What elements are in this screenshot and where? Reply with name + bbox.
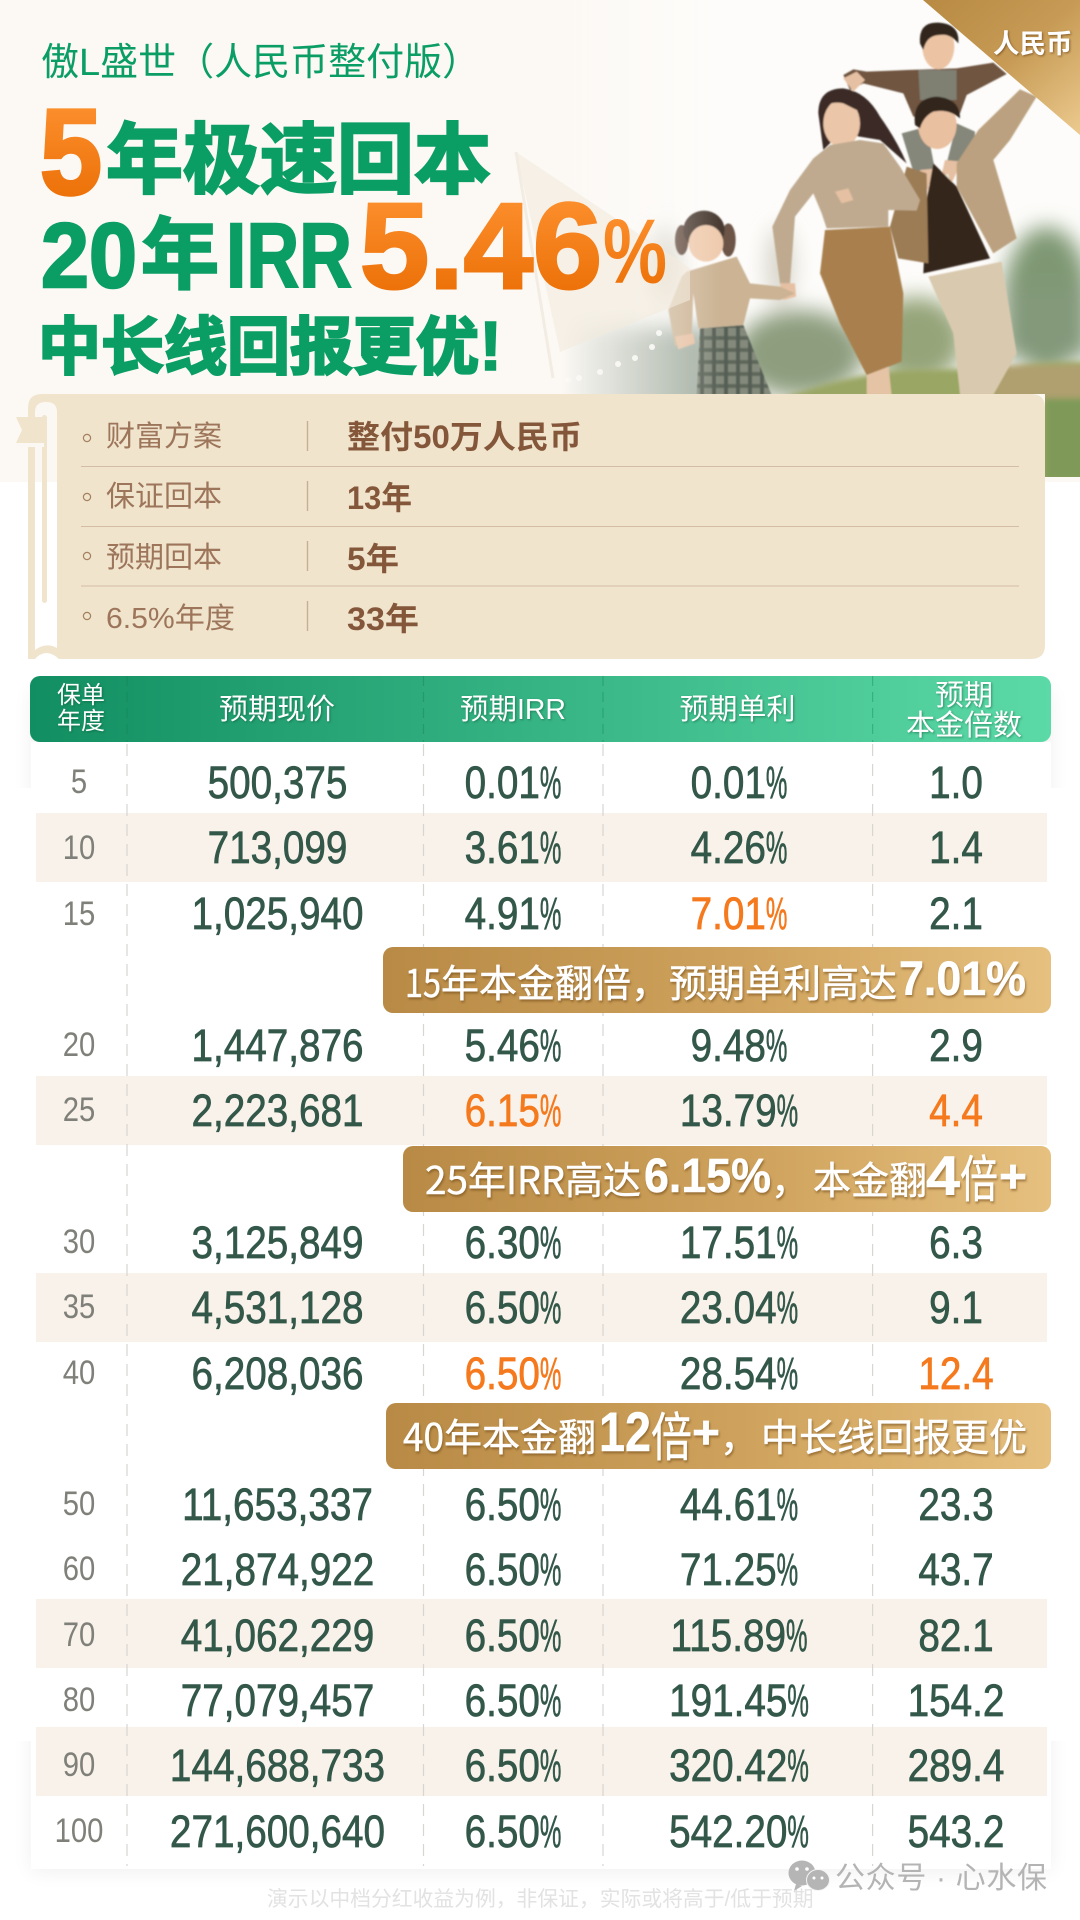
row: 6.5%年度: 6.5%年度 — [106, 602, 235, 635]
callout: 25 year: 4 — [926, 1144, 960, 1207]
row: year 40 — [63, 1348, 994, 1399]
row: year 20: 9.48% — [691, 1020, 787, 1071]
corner ribbon: 人民币 — [923, 0, 1080, 135]
row: year 70: 6.50% — [465, 1610, 561, 1661]
row: year 15: 4.91% — [465, 888, 561, 939]
row: year 40: 12.4 — [918, 1348, 994, 1399]
row: year 20 — [63, 1020, 983, 1071]
row: year 50 — [63, 1479, 994, 1530]
callout: 25 year — [403, 1140, 1051, 1212]
row: year 25: 13.79% — [680, 1085, 798, 1136]
table rows — [55, 757, 1004, 1857]
row: year 15: 2.1 — [929, 888, 983, 939]
row: year 20: 2.9 — [929, 1020, 983, 1071]
row: year 25: 2,223,681 — [191, 1085, 364, 1136]
row: year 70: 115.89% — [671, 1610, 807, 1661]
callout: 25 year: IRR — [506, 1150, 565, 1205]
table header: 年度 — [57, 708, 105, 735]
row: year 10: 10 — [63, 828, 95, 867]
row: year 70: 82.1 — [918, 1610, 994, 1661]
table header: 预期现价 — [219, 694, 335, 726]
row: 财富方案: 整付50万人民币 — [347, 419, 582, 455]
row: 预期回本: 5年 — [347, 541, 399, 577]
table stripes — [36, 813, 1047, 1796]
table header: 保单 — [57, 682, 105, 709]
background: misty trees — [575, 213, 1080, 394]
product name: 傲L盛世（人民币整付版） — [41, 42, 480, 84]
row: year 10: 4.26% — [691, 822, 787, 873]
row: year 70: 41,062,229 — [181, 1610, 374, 1661]
row: year 5: 0.01% — [691, 757, 787, 808]
row: year 80: 80 — [63, 1680, 95, 1719]
row: year 30: 6.30% — [465, 1217, 561, 1268]
row: year 60: 60 — [63, 1549, 95, 1588]
row: year 30 — [63, 1217, 983, 1268]
row: year 10: 713,099 — [208, 822, 347, 873]
row: 预期回本: 预期回本 — [106, 541, 222, 574]
callout: 15 year: 年本金翻倍，预期单利高达 — [441, 953, 897, 1008]
headline line 2 — [41, 178, 667, 314]
row: 预期回本 — [83, 541, 399, 577]
table header: 预期单利 — [679, 693, 796, 726]
callout: 25 year: 年 — [468, 1150, 506, 1205]
row: year 80 — [63, 1675, 1004, 1726]
headline line 2: IRR — [226, 205, 352, 307]
row: year 5 — [71, 757, 983, 808]
row: year 25: 6.15% — [465, 1085, 561, 1136]
row: year 10: 1.4 — [929, 822, 983, 873]
row: year 5: 500,375 — [208, 757, 347, 808]
callout: 40 year: 中长线回报更优 — [761, 1407, 1027, 1462]
callout: 15 year — [383, 947, 1051, 1013]
row: year 20: 5.46% — [465, 1020, 561, 1071]
row: year 50: 11,653,337 — [182, 1479, 373, 1530]
row: year 50: 50 — [63, 1484, 95, 1523]
row: year 50: 6.50% — [465, 1479, 561, 1530]
callout: 25 year: 高达 — [565, 1150, 641, 1205]
row: year 90: 90 — [63, 1745, 95, 1784]
row: year 25 — [63, 1085, 983, 1136]
background: grass — [787, 361, 1080, 483]
callout: 25 year: ， — [771, 1150, 809, 1205]
row: year 80: 6.50% — [465, 1675, 561, 1726]
headline line 2: 年 — [141, 193, 219, 305]
photo: family running in field — [560, 0, 1080, 483]
row: 保证回本: 13年 — [347, 480, 412, 516]
headline line 1: 年极速回本 — [106, 99, 491, 210]
callout: 15 year: 7.01% — [899, 953, 1026, 1006]
callout: 15 year: 15 — [405, 953, 441, 1008]
row: 6.5%年度 — [83, 601, 419, 637]
table header: 预期 — [935, 680, 993, 712]
row: year 40: 6.50% — [465, 1348, 561, 1399]
panel: wealth plan summary — [16, 394, 1045, 660]
title block — [38, 42, 667, 388]
row: year 10 — [63, 822, 983, 873]
callout: 40 year: 12 — [599, 1400, 651, 1463]
callout: 40 year: 40 — [403, 1407, 444, 1462]
row: year 50: 44.61% — [680, 1479, 798, 1530]
headline line 1: 5 — [40, 84, 102, 220]
row: year 90: 6.50% — [465, 1740, 561, 1791]
row: year 60: 43.7 — [918, 1544, 994, 1595]
row: 保证回本 — [83, 480, 412, 516]
book spine slot — [35, 402, 57, 650]
figure: woman — [772, 72, 920, 395]
row: year 70 — [63, 1610, 994, 1661]
callout: 40 year: + — [692, 1406, 720, 1458]
headline line 3: ! — [479, 307, 502, 385]
row: year 10: 3.61% — [465, 822, 561, 873]
row: year 90: 320.42% — [669, 1740, 809, 1791]
row: 6.5%年度: 33年 — [347, 601, 419, 637]
row: year 90: 144,688,733 — [170, 1740, 385, 1791]
hero background — [0, 0, 1080, 482]
row: year 80: 77,079,457 — [181, 1675, 374, 1726]
row: year 80: 191.45% — [669, 1675, 809, 1726]
row: year 5: 1.0 — [929, 757, 983, 808]
ribbon bookmark — [16, 417, 43, 443]
row: 财富方案 — [83, 419, 582, 455]
dandelion seeds — [578, 330, 662, 381]
row: year 25: 25 — [63, 1090, 95, 1129]
figure: girl — [668, 211, 795, 395]
row: year 5: 0.01% — [465, 757, 561, 808]
headline line 1 — [40, 84, 491, 220]
row: year 35: 6.50% — [465, 1282, 561, 1333]
row: year 60: 71.25% — [680, 1544, 798, 1595]
row: year 40: 40 — [63, 1353, 95, 1392]
headline line 2: 20 — [41, 205, 137, 307]
row: year 100 — [55, 1806, 1004, 1857]
row: year 80: 154.2 — [908, 1675, 1004, 1726]
row: year 90: 289.4 — [908, 1740, 1004, 1791]
callout: 40 year: ， — [720, 1407, 758, 1462]
callout: 25 year: 本金翻 — [813, 1150, 927, 1205]
row: year 30: 6.3 — [929, 1217, 983, 1268]
row: year 40: 6,208,036 — [191, 1348, 364, 1399]
row: year 15 — [63, 888, 983, 939]
figure: boy on shoulders — [842, 22, 1008, 192]
row: year 30: 30 — [63, 1222, 95, 1261]
icon: wechat — [788, 1860, 830, 1891]
headline line 3: 中长线回报更优 — [38, 297, 479, 388]
kite — [516, 152, 690, 378]
row: year 35: 23.04% — [680, 1282, 798, 1333]
row: year 50: 23.3 — [918, 1479, 994, 1530]
row: year 35 — [63, 1282, 983, 1333]
row: year 40: 28.54% — [680, 1348, 798, 1399]
callout: 40 year: 年本金翻 — [444, 1407, 596, 1462]
table card shadow — [31, 690, 1051, 1872]
watermark: 公众号 · 心水保 — [835, 1862, 1047, 1895]
callout: 25 year: 倍 — [960, 1140, 998, 1212]
footnote: 演示以中档分红收益为例，非保证，实际或将高于/低于预期 — [267, 1888, 814, 1911]
callout: 25 year: 6.15% — [644, 1150, 771, 1203]
callout: 40 year: 倍 — [651, 1396, 692, 1471]
row: year 35: 35 — [63, 1287, 95, 1326]
row: year 100: 543.2 — [908, 1806, 1004, 1857]
row: year 35: 4,531,128 — [191, 1282, 364, 1333]
callout: 40 year — [386, 1396, 1051, 1471]
row: year 100: 100 — [55, 1811, 103, 1850]
row: year 15: 7.01% — [691, 888, 787, 939]
row: year 20: 1,447,876 — [191, 1020, 364, 1071]
row: year 70: 70 — [63, 1615, 95, 1654]
row: year 60: 21,874,922 — [181, 1544, 374, 1595]
row: year 25: 4.4 — [929, 1085, 983, 1136]
row: year 20: 20 — [63, 1025, 95, 1064]
row: year 100: 6.50% — [465, 1806, 561, 1857]
row: 财富方案: 财富方案 — [106, 420, 222, 453]
row: year 15: 1,025,940 — [191, 888, 364, 939]
row: year 5: 5 — [71, 762, 87, 801]
row: year 30: 17.51% — [680, 1217, 798, 1268]
row: 保证回本: 保证回本 — [106, 480, 222, 513]
table header: 预期IRR — [460, 694, 566, 726]
corner ribbon: 人民币: 人民币 — [993, 29, 1072, 59]
row: year 90 — [63, 1740, 1004, 1791]
table header — [30, 676, 1051, 742]
row: year 30: 3,125,849 — [191, 1217, 364, 1268]
row: year 100: 542.20% — [669, 1806, 809, 1857]
callout: 25 year: 25 — [425, 1150, 468, 1205]
row: year 15: 15 — [63, 894, 95, 933]
callout: 25 year: + — [999, 1150, 1027, 1202]
table header: 本金倍数 — [906, 709, 1022, 742]
row: year 100: 271,600,640 — [170, 1806, 385, 1857]
row: year 60 — [63, 1544, 994, 1595]
row: year 60: 6.50% — [465, 1544, 561, 1595]
row: year 35: 9.1 — [929, 1282, 983, 1333]
headline line 2: % — [603, 201, 667, 303]
figure: man — [890, 89, 1037, 395]
headline line 2: 5.46 — [360, 178, 602, 314]
